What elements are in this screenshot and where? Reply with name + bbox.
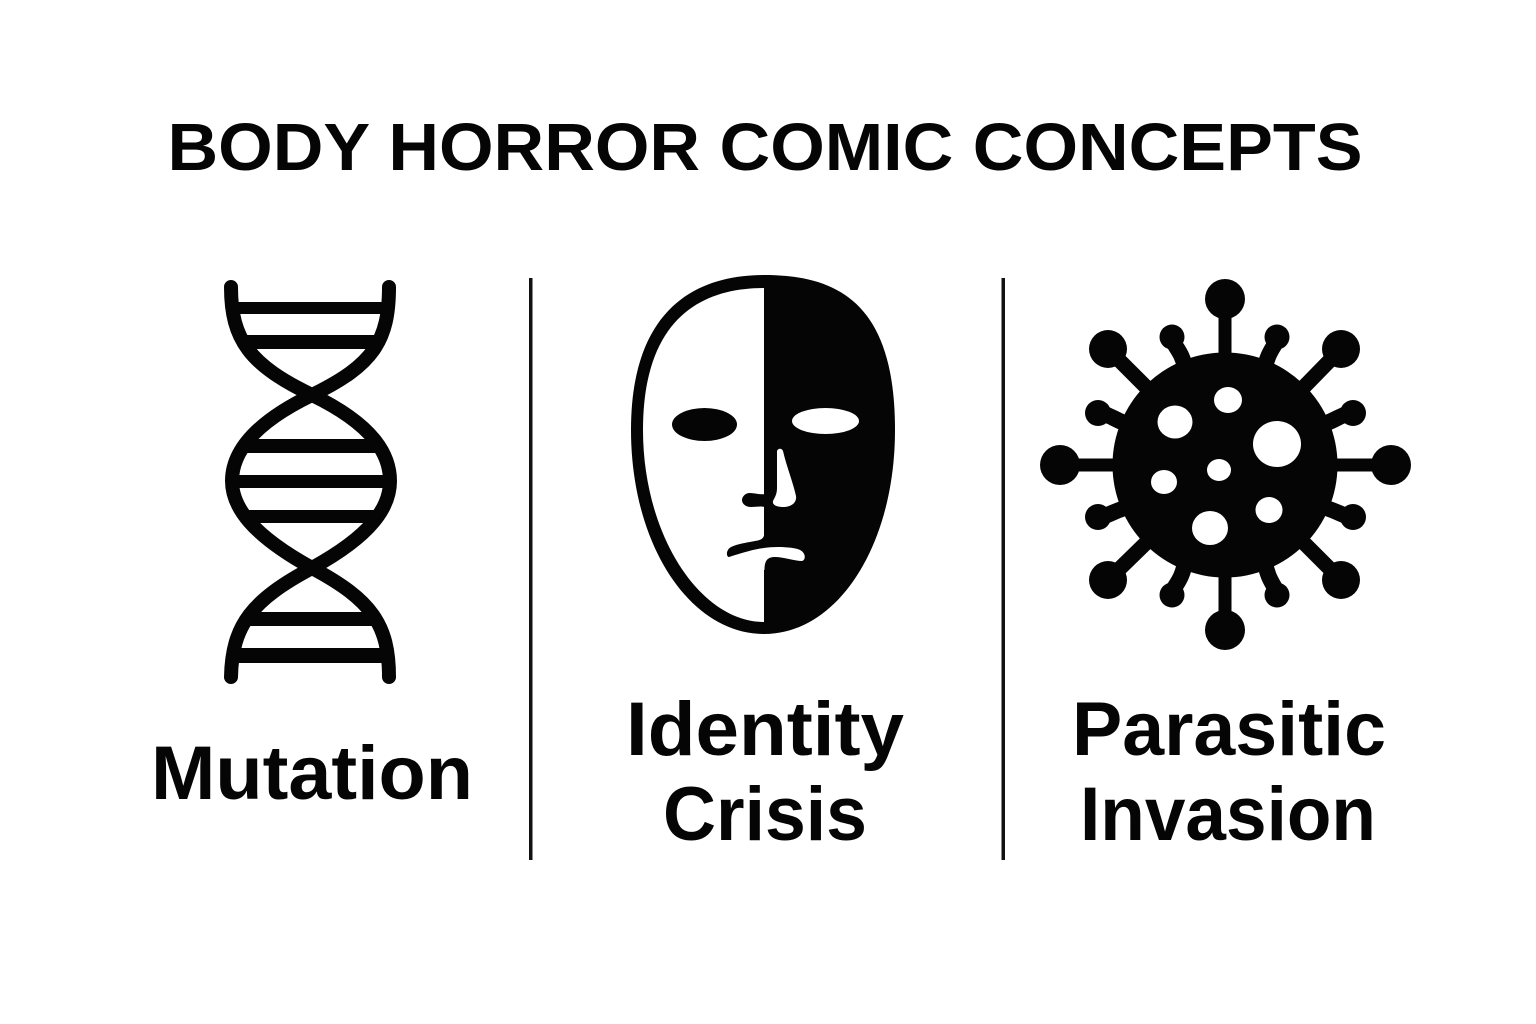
mask outline and dark half: [631, 275, 895, 634]
mouth left: [727, 533, 764, 557]
divider right: [1002, 278, 1005, 860]
icon: DNA helix: [231, 287, 390, 677]
divider left: [529, 278, 532, 860]
label: Identity Crisis: [626, 687, 904, 857]
icon: virus: [1040, 279, 1411, 650]
label: Parasitic Invasion: Invasion: [1080, 772, 1376, 857]
mask light half: [643, 288, 764, 622]
label: Identity Crisis: Crisis: [663, 772, 867, 857]
right eye: [792, 408, 859, 434]
virus body: [1112, 352, 1338, 578]
title: BODY HORROR COMIC CONCEPTS: [168, 110, 1362, 185]
left eye: [672, 408, 737, 441]
icon: split face mask: [631, 275, 895, 634]
label: Mutation: Mutation: [151, 731, 473, 816]
label: Parasitic Invasion: Parasitic: [1072, 687, 1386, 772]
mouth right: [764, 547, 805, 570]
spike tips: [1040, 279, 1411, 650]
label: Parasitic Invasion: [1072, 687, 1386, 857]
nose highlight: [773, 449, 796, 507]
label: Identity Crisis: Identity: [626, 687, 904, 772]
virus spikes: [1060, 300, 1390, 630]
nose shadow: [742, 493, 765, 507]
body holes: [1151, 387, 1301, 545]
